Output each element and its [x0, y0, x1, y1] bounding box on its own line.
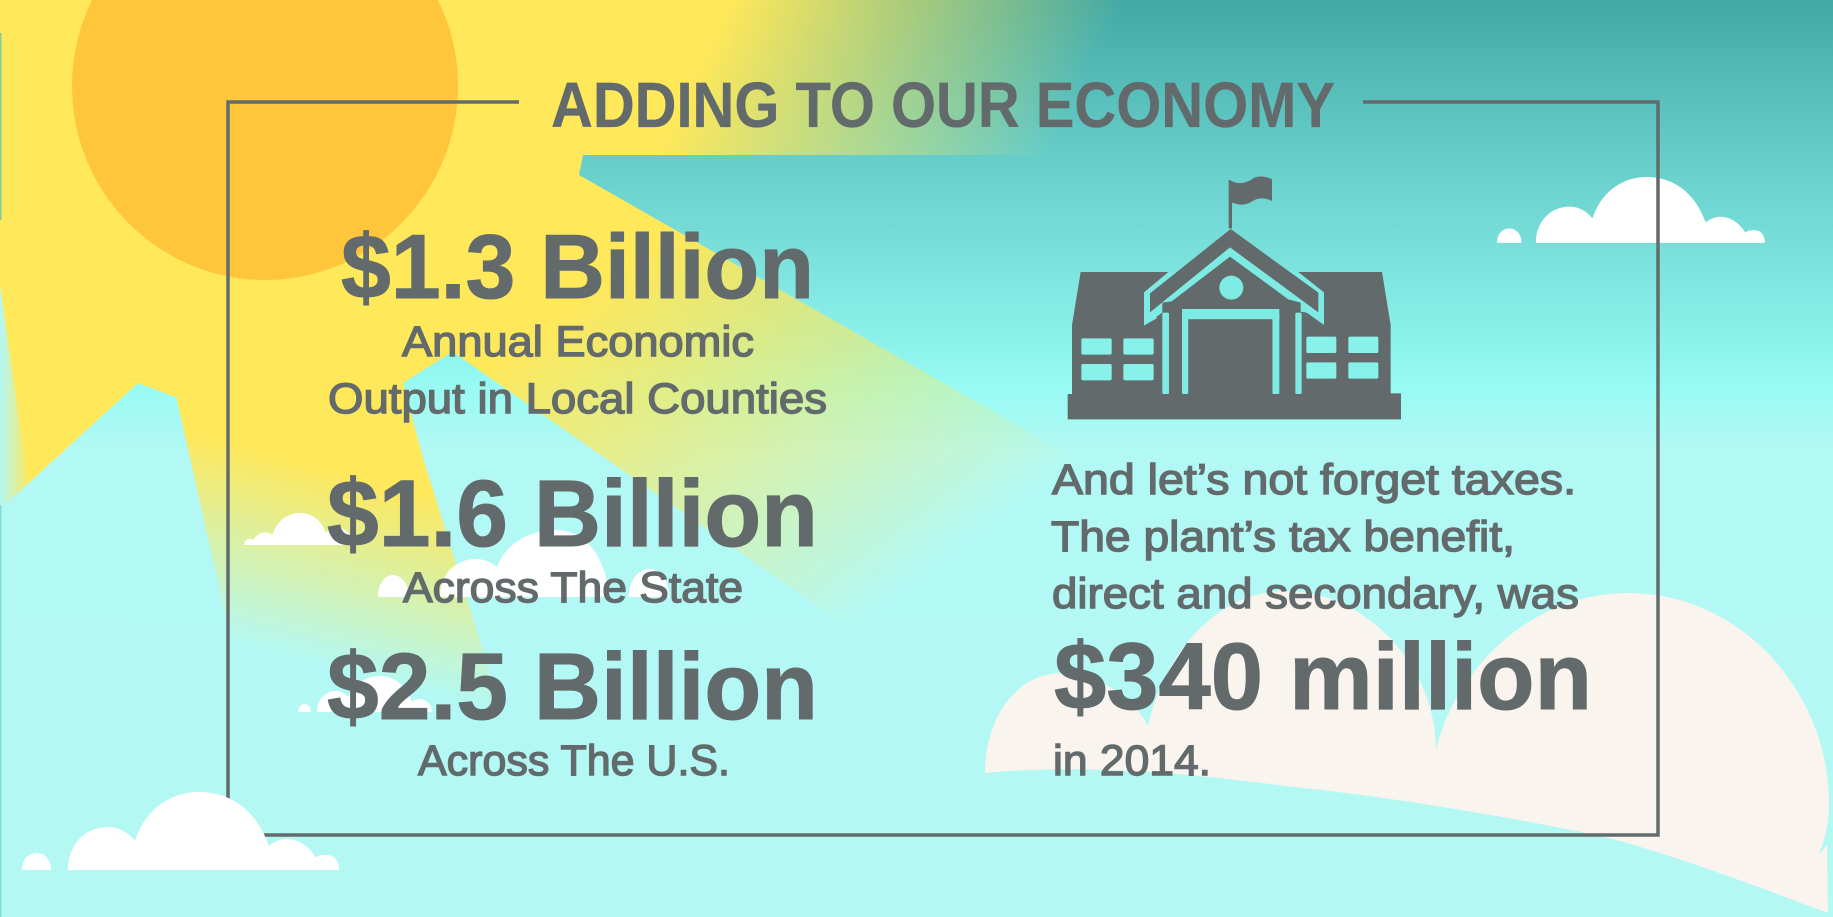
stat: 1.3 billion: Output in Local Counties [328, 375, 827, 423]
tax text: The plant’s tax benefit, [1051, 513, 1515, 561]
stat: 2.5 billion: $2.5 Billion [327, 634, 818, 740]
cloud: large cream [985, 591, 1829, 913]
stat: 1.3 billion: Annual Economic [402, 318, 754, 366]
cloud: bottom left [22, 792, 339, 870]
icon: school building [1068, 176, 1401, 419]
stat: 2.5 billion [327, 634, 818, 785]
tax text [1051, 456, 1579, 618]
stat: 2.5 billion: Across The U.S. [418, 737, 730, 785]
title: ADDING TO OUR ECONOMY [551, 69, 1335, 141]
stat: 1.3 billion [328, 217, 827, 423]
stat: 1.3 billion: $1.3 Billion [341, 217, 814, 318]
tax text: And let’s not forget taxes. [1052, 456, 1576, 504]
year note: in 2014. [1053, 737, 1211, 785]
frame [228, 102, 1658, 835]
stat: 340 million: $340 million [1054, 624, 1592, 730]
stat: 1.6 billion: Across The State [403, 564, 743, 612]
stat: 1.6 billion: $1.6 Billion [327, 461, 818, 567]
stat: 1.6 billion [327, 461, 818, 612]
cloud: top right [1497, 177, 1765, 243]
cloud: behind second figure [378, 530, 669, 597]
sun rays [0, 0, 1130, 917]
tax text: direct and secondary, was [1052, 570, 1579, 618]
cloud: behind first figure [244, 513, 353, 545]
cloud: behind third figure [298, 676, 432, 712]
sun [72, 0, 458, 280]
